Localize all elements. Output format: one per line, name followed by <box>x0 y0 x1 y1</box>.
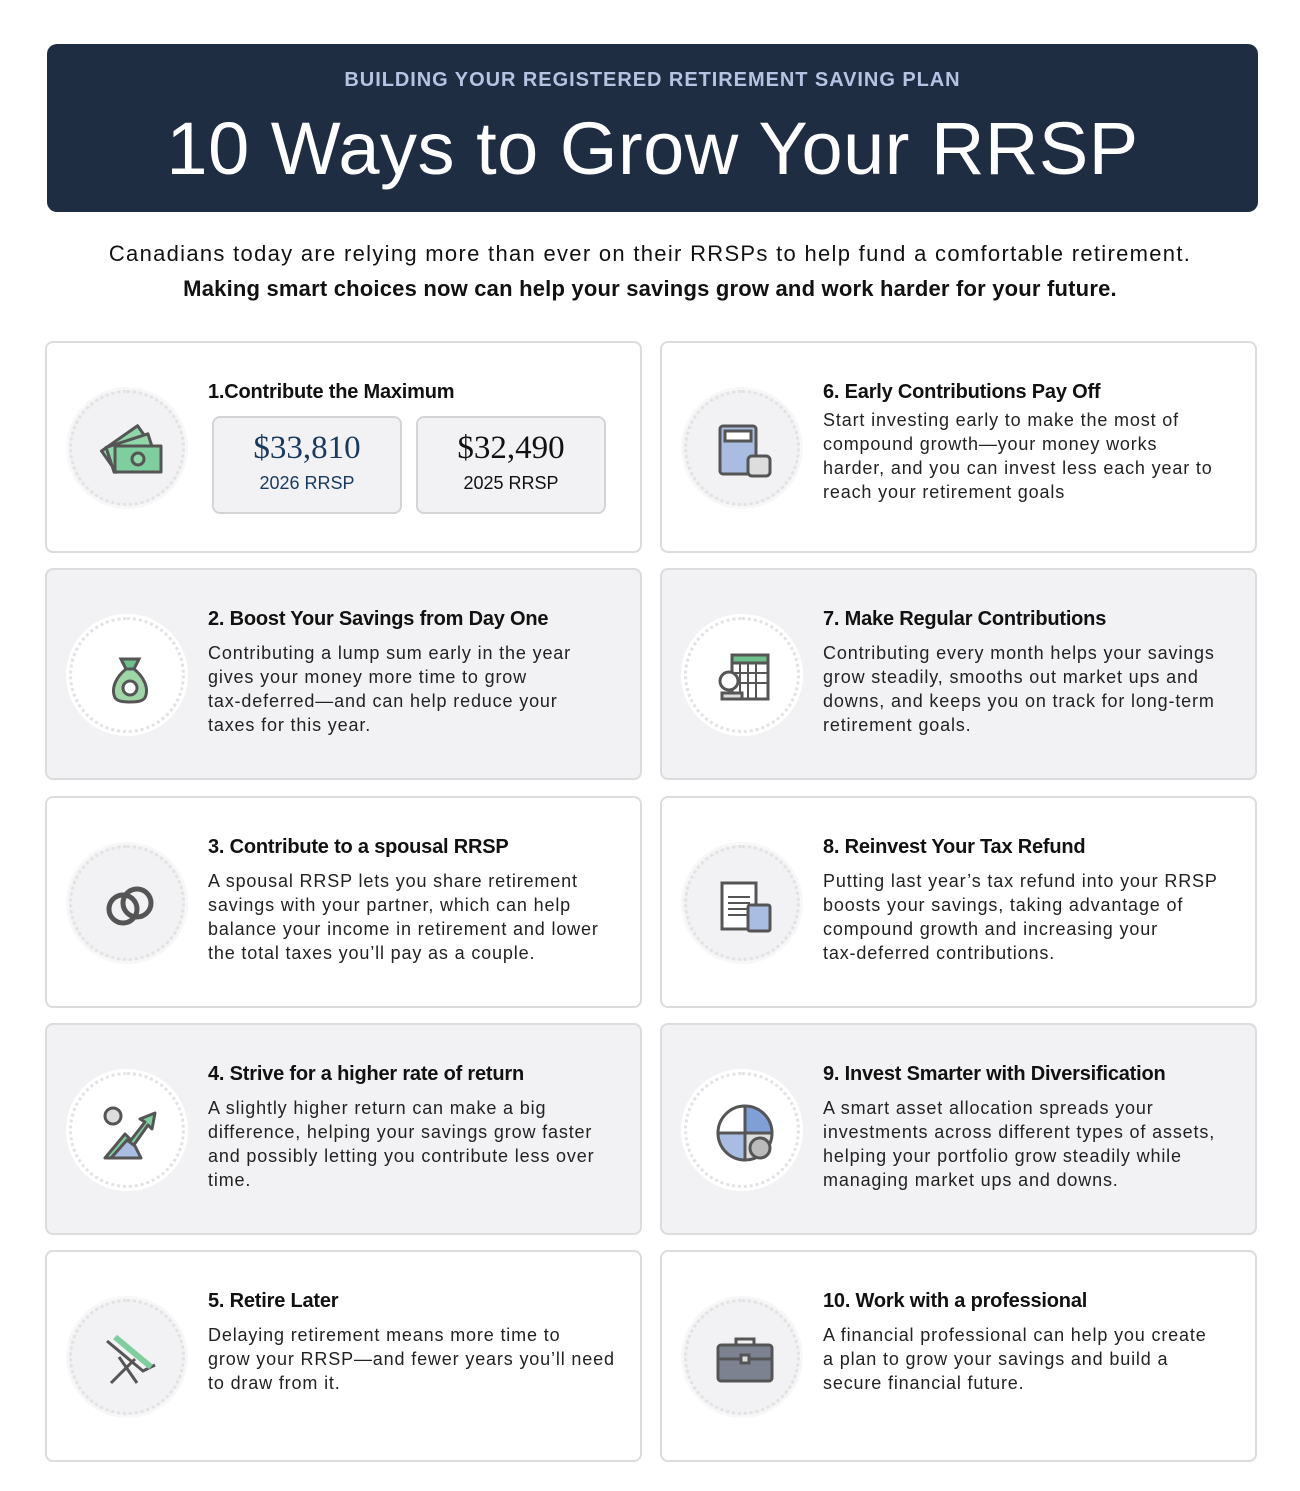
text: A slightly higher return can make a big <box>208 1098 546 1118</box>
text: boosts your savings, taking advantage of <box>823 895 1183 915</box>
panel 2 <box>45 568 642 780</box>
text: Putting last year’s tax refund into your RRSP <box>823 871 1218 891</box>
stat: 2026: $33,810 <box>253 430 361 466</box>
text: 4. Strive for a higher rate of return <box>208 1063 524 1085</box>
text: Start investing early to make the most of <box>823 410 1179 430</box>
text: Contributing every month helps your savings <box>823 643 1215 663</box>
text: to draw from it. <box>208 1373 341 1393</box>
text: harder, and you can invest less each year to <box>823 458 1213 478</box>
text: reach your retirement goals <box>823 482 1065 502</box>
text: difference, helping your savings grow faster <box>208 1122 592 1142</box>
text: A spousal RRSP lets you share retirement <box>208 871 578 891</box>
text: 2. Boost Your Savings from Day One <box>208 608 548 630</box>
text: helping your portfolio grow steadily while <box>823 1146 1182 1166</box>
panel 10 <box>660 1250 1257 1462</box>
text: tax-deferred contributions. <box>823 943 1055 963</box>
text <box>823 1063 1215 1190</box>
icon: money bag <box>69 617 185 733</box>
text: secure financial future. <box>823 1373 1024 1393</box>
text: A financial professional can help you create <box>823 1325 1207 1345</box>
text: balance your income in retirement and lower <box>208 919 599 939</box>
text: 6. Early Contributions Pay Off <box>823 381 1100 403</box>
text: grow steadily, smooths out market ups and <box>823 667 1199 687</box>
panel 4 <box>45 1023 642 1235</box>
text: grow your RRSP—and fewer years you’ll need <box>208 1349 615 1369</box>
text <box>823 608 1215 735</box>
icon: calculator <box>684 390 800 506</box>
panel 6 <box>660 341 1257 553</box>
text: gives your money more time to grow <box>208 667 527 687</box>
icon: beach chair <box>69 1299 185 1415</box>
text: Delaying retirement means more time to <box>208 1325 560 1345</box>
text: and possibly letting you contribute less over <box>208 1146 594 1166</box>
text: 10. Work with a professional <box>823 1290 1087 1312</box>
text: a plan to grow your savings and build a <box>823 1349 1168 1369</box>
text: taxes for this year. <box>208 715 371 735</box>
header banner <box>47 44 1258 212</box>
text <box>823 836 1218 963</box>
text: tax-deferred—and can help reduce your <box>208 691 558 711</box>
panel 8 <box>660 796 1257 1008</box>
text <box>823 1290 1207 1393</box>
text <box>208 836 599 963</box>
text: savings with your partner, which can help <box>208 895 571 915</box>
panel 5 <box>45 1250 642 1462</box>
stat: 2025: 2025 RRSP <box>463 473 559 493</box>
text: 8. Reinvest Your Tax Refund <box>823 836 1085 858</box>
text: compound growth and increasing your <box>823 919 1158 939</box>
text: investments across different types of assets, <box>823 1122 1215 1142</box>
panel 1 <box>45 341 642 553</box>
icon: calendar <box>684 617 800 733</box>
panel 3 <box>45 796 642 1008</box>
text: the total taxes you’ll pay as a couple. <box>208 943 535 963</box>
icon: growth arrow <box>69 1072 185 1188</box>
text: 1.Contribute the Maximum <box>208 381 454 403</box>
text <box>208 1290 615 1393</box>
text <box>823 381 1213 502</box>
title: 10 Ways to Grow Your RRSP <box>166 107 1139 190</box>
icon: rings <box>69 845 185 961</box>
text: A smart asset allocation spreads your <box>823 1098 1154 1118</box>
text: Contributing a lump sum early in the year <box>208 643 571 663</box>
intro text: Making smart choices now can help your savings grow and work harder for your future. <box>183 276 1117 301</box>
icon: briefcase <box>684 1299 800 1415</box>
subtitle: BUILDING YOUR REGISTERED RETIREMENT SAVING PLAN <box>344 69 961 91</box>
intro text <box>109 241 1191 301</box>
text: time. <box>208 1170 251 1190</box>
text: 5. Retire Later <box>208 1290 338 1312</box>
stat: 2026 <box>212 416 402 514</box>
text <box>208 1063 594 1190</box>
text: 7. Make Regular Contributions <box>823 608 1106 630</box>
icon: pie chart <box>684 1072 800 1188</box>
stat: 2025 <box>416 416 606 514</box>
text: compound growth—your money works <box>823 434 1157 454</box>
text: 3. Contribute to a spousal RRSP <box>208 836 508 858</box>
text: managing market ups and downs. <box>823 1170 1119 1190</box>
text <box>208 608 571 735</box>
icon: tax form <box>684 845 800 961</box>
text: downs, and keeps you on track for long-term <box>823 691 1215 711</box>
panel 9 <box>660 1023 1257 1235</box>
stat: 2026: 2026 RRSP <box>259 473 355 493</box>
intro text: Canadians today are relying more than ever on their RRSPs to help fund a comfortable retirement. <box>109 241 1191 266</box>
icon: money <box>69 390 185 506</box>
stat: 2025: $32,490 <box>457 430 565 466</box>
panel 7 <box>660 568 1257 780</box>
text: retirement goals. <box>823 715 972 735</box>
text: 9. Invest Smarter with Diversification <box>823 1063 1166 1085</box>
